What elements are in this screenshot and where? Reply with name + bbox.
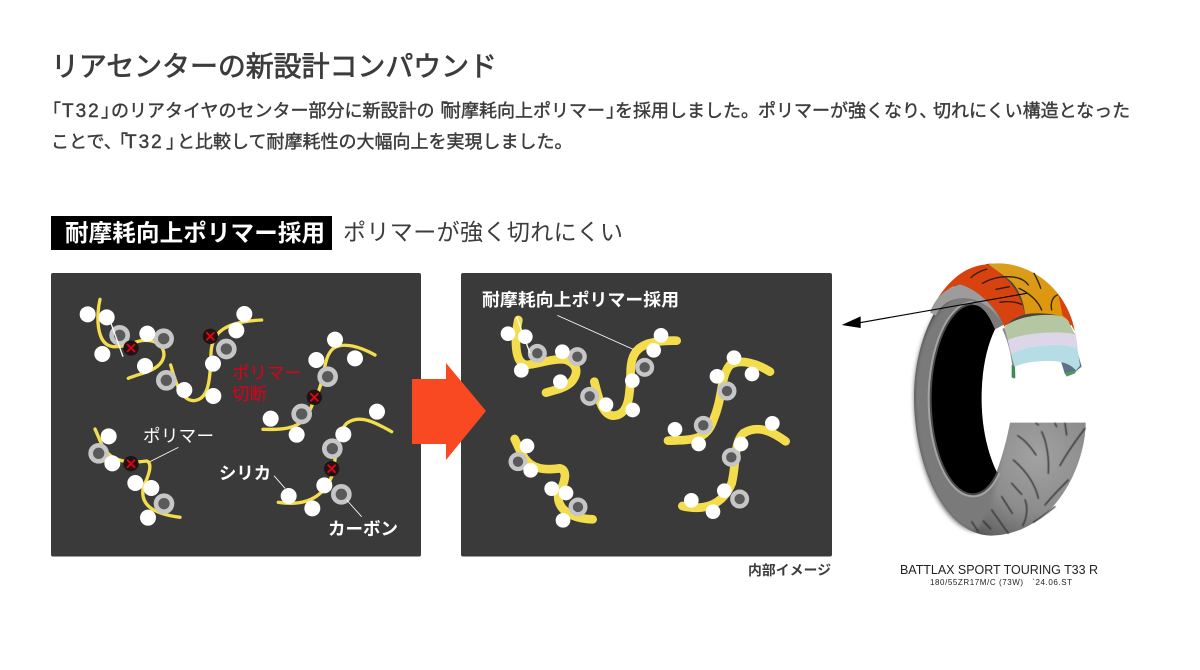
dark inner liner xyxy=(1060,355,1082,374)
layer: purple xyxy=(1008,332,1078,354)
polymer break marks xyxy=(123,329,339,476)
rim xyxy=(932,305,997,493)
tire body xyxy=(914,264,1086,536)
thick polymer chains xyxy=(515,320,786,519)
intro text: 「 xyxy=(110,132,128,152)
tread: red xyxy=(932,264,1025,327)
label: polymer cut xyxy=(232,363,302,404)
silica particles xyxy=(80,306,385,526)
caption: tire model: BATTLAX SPORT TOURING T33 R xyxy=(900,563,1098,577)
panel: after xyxy=(461,273,832,556)
caption: tire model xyxy=(900,563,1098,587)
intro text: 」 xyxy=(101,101,119,121)
sidewall label band xyxy=(930,284,1002,323)
label: polymer: ポリマー xyxy=(143,426,214,446)
intro text: のリアタイヤのセンター部分に新設計の xyxy=(111,101,434,121)
leader lines xyxy=(517,315,633,353)
tire hole xyxy=(932,305,997,493)
intro text: ポリマーが強くなり、 xyxy=(758,101,937,121)
intro text: T32 xyxy=(62,101,101,122)
layer: green xyxy=(1004,315,1076,340)
tire cutaway xyxy=(914,263,1088,536)
label: polymer cut: ポリマー xyxy=(232,363,302,383)
bead green xyxy=(1065,370,1077,377)
panel: before xyxy=(51,273,421,556)
label: polymer cut: 切断 xyxy=(232,384,267,404)
intro text: 「 xyxy=(430,101,448,121)
intro text: 耐摩耗向上ポリマー xyxy=(443,101,605,121)
label: wear-resistant polymer: 耐摩耗向上ポリマー採用 xyxy=(482,289,679,310)
title: リアセンターの新設計コンパウンド xyxy=(51,51,497,82)
intro text: ことで、 xyxy=(51,132,122,152)
section heading xyxy=(51,216,623,250)
intro text: を採用しました。 xyxy=(615,101,759,121)
intro text: 」 xyxy=(166,132,184,152)
tread grooves lower xyxy=(972,423,1085,533)
cutaway top xyxy=(930,263,1082,378)
leader lines xyxy=(111,323,362,517)
sidewall xyxy=(914,287,1011,532)
section heading: ポリマーが強く切れにくい xyxy=(343,219,623,245)
carbon particles xyxy=(511,346,747,514)
tread grooves upper xyxy=(971,269,1057,310)
intro text: T32 xyxy=(125,132,164,153)
intro text: 」 xyxy=(606,101,624,121)
thin polymer chains xyxy=(95,299,392,517)
carbon particles xyxy=(91,327,349,512)
silica particles xyxy=(501,326,780,528)
arrow: before to after xyxy=(412,363,486,460)
caption: tire model: 180/55ZR17M/C (73W) `24.06.ST xyxy=(930,578,1072,587)
intro text: 「 xyxy=(43,101,61,121)
section heading: 耐摩耗向上ポリマー採用 xyxy=(65,220,325,246)
intro text: 切れにくい構造となった xyxy=(933,101,1130,121)
arrow: pointer to tire xyxy=(842,293,1027,328)
intro text xyxy=(43,101,1130,153)
label: carbon: カーボン xyxy=(328,519,398,539)
layer: blue xyxy=(1011,345,1080,370)
bead inner edge xyxy=(1003,328,1014,378)
label: silica: シリカ xyxy=(219,463,271,483)
tread: orange xyxy=(988,263,1075,331)
caption: internal image: 内部イメージ xyxy=(748,562,831,578)
intro text: と比較して耐摩耗性の大幅向上を実現しました。 xyxy=(177,132,572,152)
cutaway opening xyxy=(982,325,1088,472)
